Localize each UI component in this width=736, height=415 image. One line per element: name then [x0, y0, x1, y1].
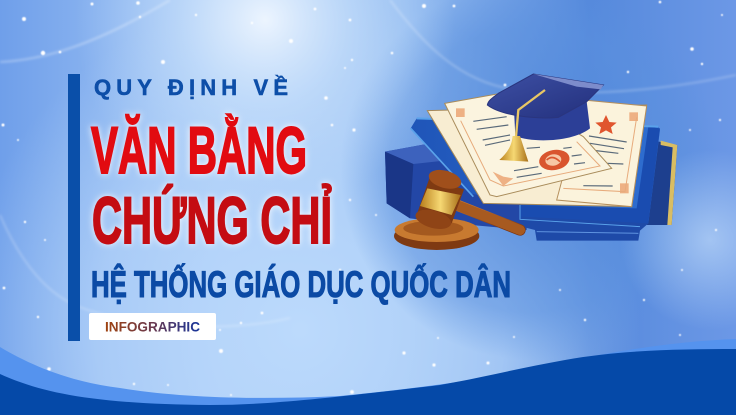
bottom wave: dark blue band [0, 349, 736, 415]
vertical accent bar [68, 74, 80, 341]
infographic badge [89, 313, 216, 340]
illustration: books, diplomas, cap and gavel [385, 74, 677, 250]
icon: back diploma [427, 100, 647, 207]
icon: front diploma [445, 92, 612, 197]
icon: graduation cap [487, 74, 603, 162]
main title: văn bằng: VĂN BẰNG [91, 113, 307, 187]
icon: stack of blue books [385, 118, 677, 241]
infographic badge: INFOGRAPHIC [105, 320, 200, 334]
main title: chứng chỉ: CHỨNG CHỈ [92, 183, 332, 257]
bottom wave: light blue band [0, 339, 736, 415]
eyebrow heading: QUY ĐỊNH VỀ [94, 75, 288, 100]
main title: văn bằng [91, 113, 307, 187]
main title: văn bằng: VĂN BẰNG [91, 113, 307, 187]
icon: gavel [394, 167, 520, 250]
main title: chứng chỉ [92, 183, 332, 257]
subtitle: HỆ THỐNG GIÁO DỤC QUỐC DÂN [91, 263, 511, 305]
main title: chứng chỉ: CHỨNG CHỈ [92, 183, 332, 257]
